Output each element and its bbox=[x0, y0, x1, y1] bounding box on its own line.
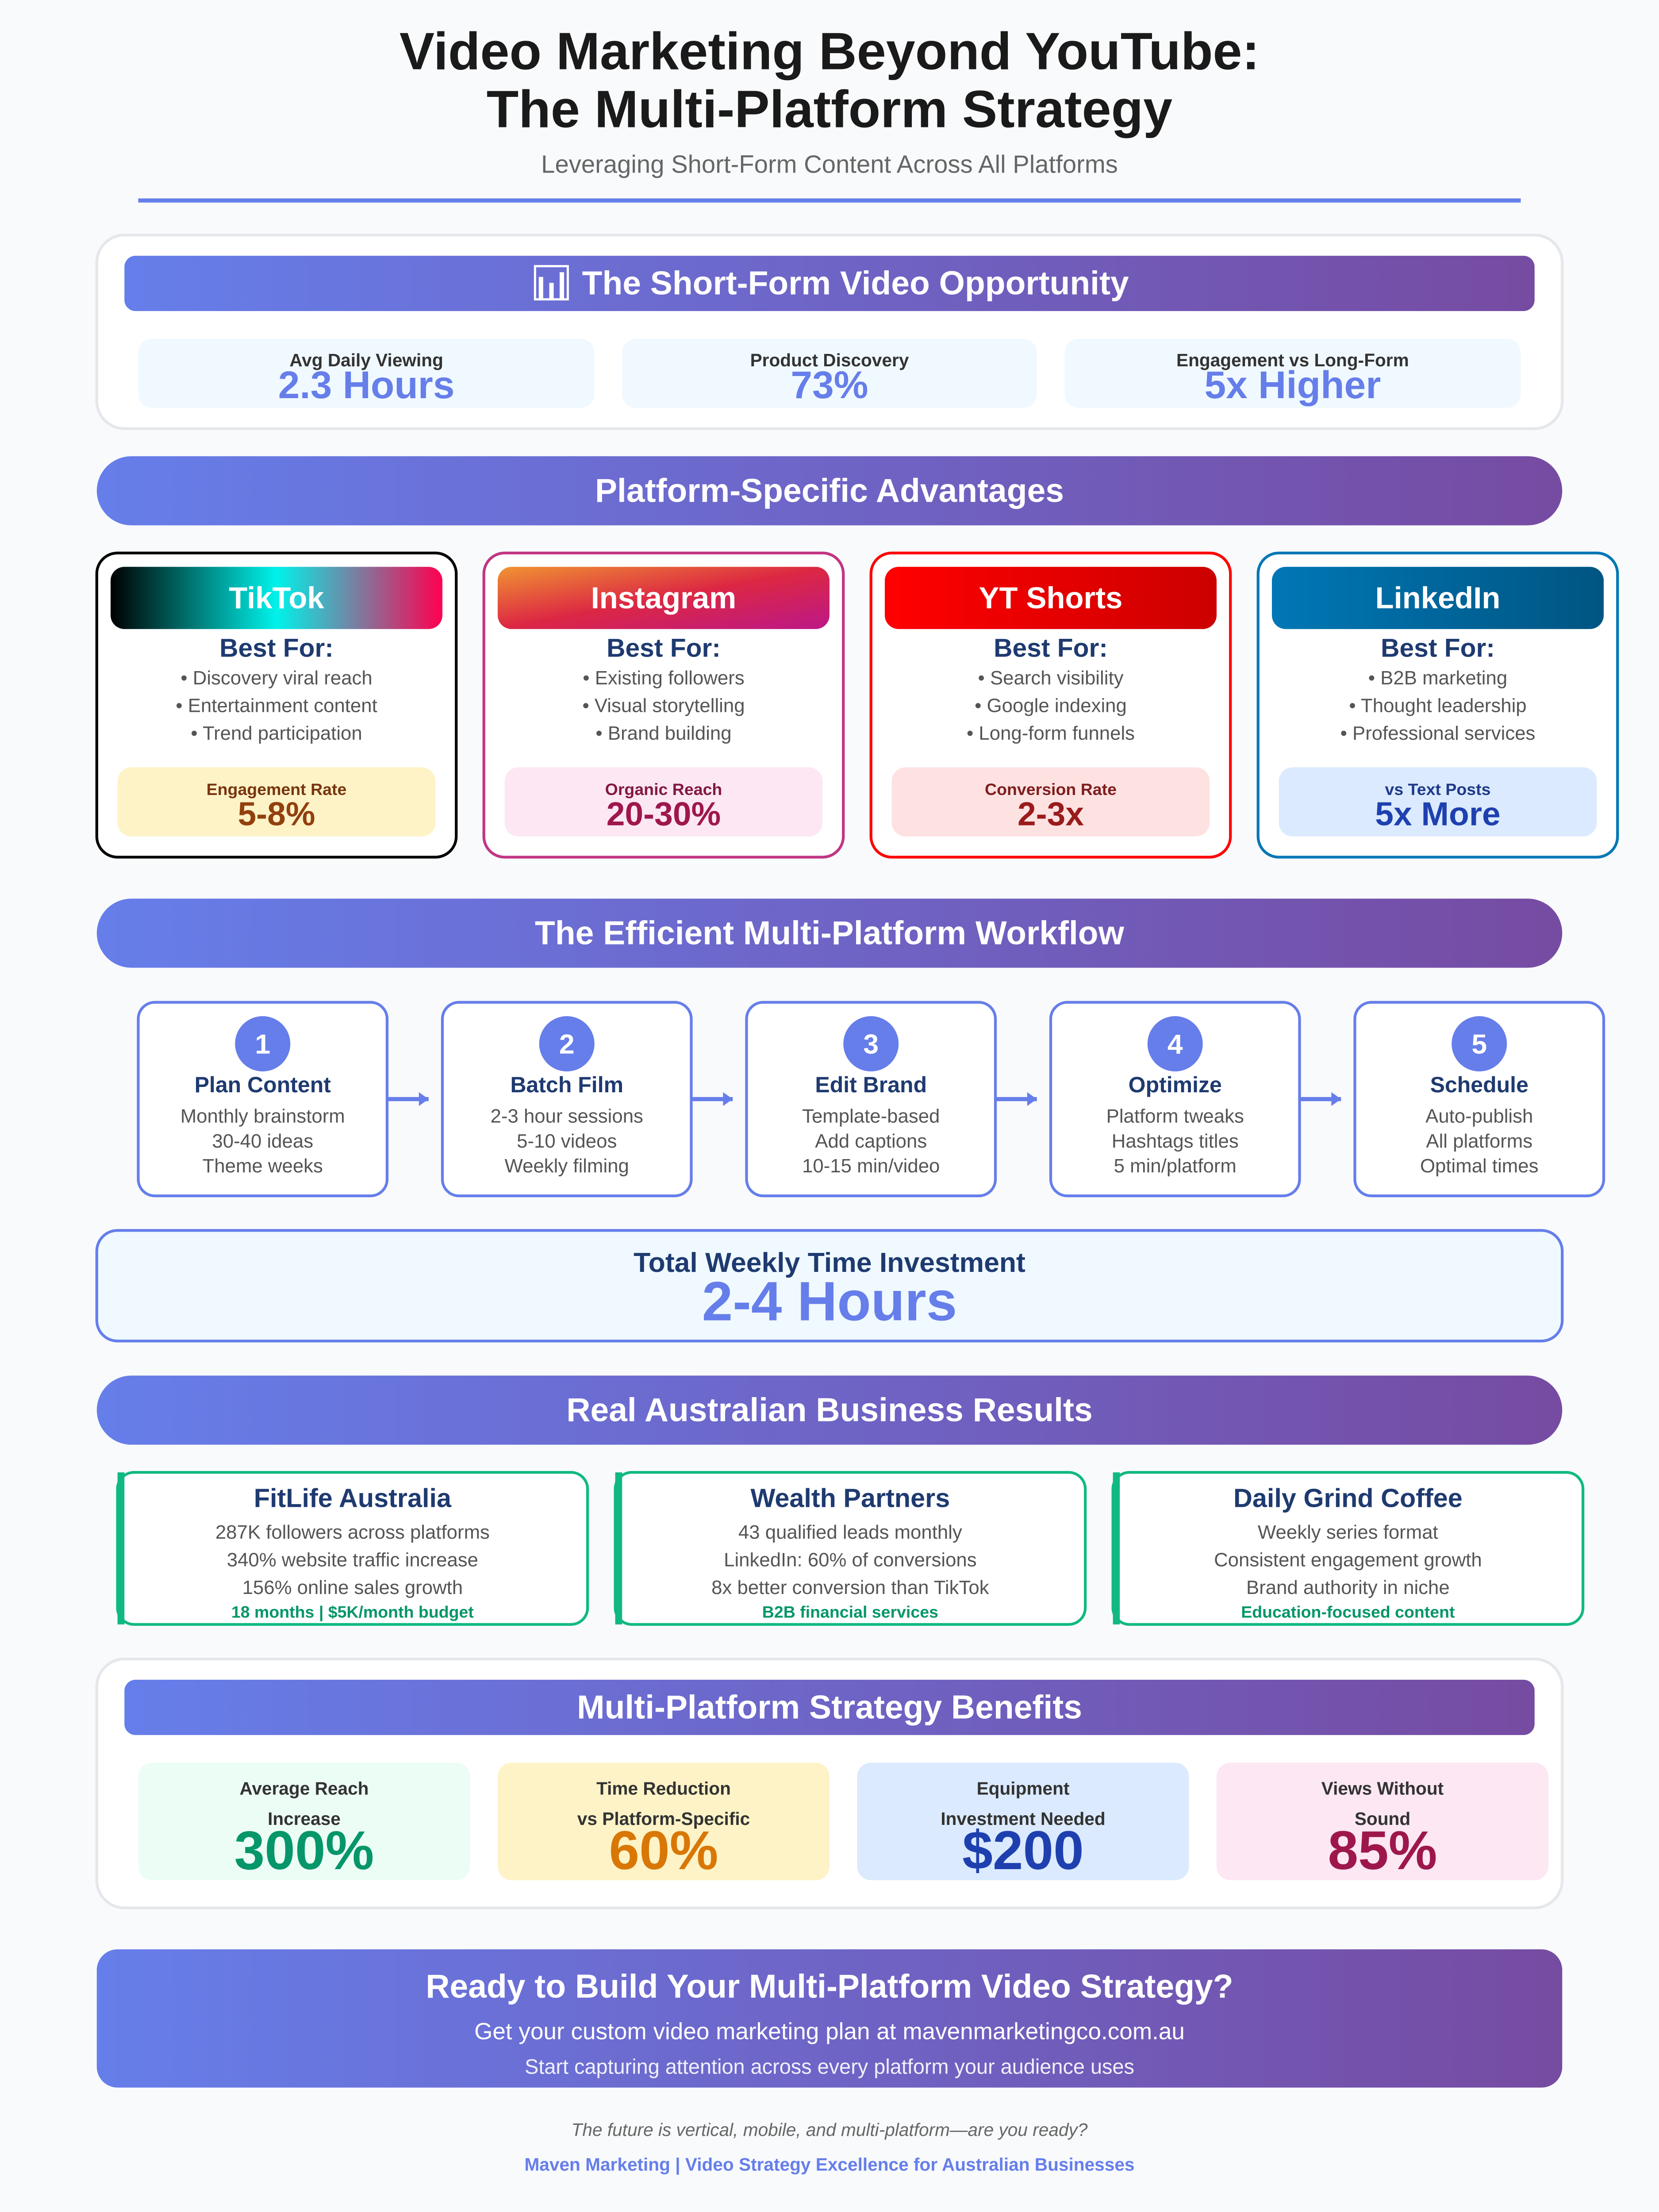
panel: LinkedIn: • B2B marketing bbox=[1368, 667, 1507, 689]
panel: TikTok: Best For: bbox=[219, 634, 334, 662]
step 1: plan content: Theme weeks bbox=[203, 1155, 323, 1177]
panel: TikTok bbox=[97, 553, 456, 857]
stat: engagement vs long-form bbox=[1064, 339, 1521, 408]
case study: Daily Grind Coffee: Daily Grind Coffee bbox=[1233, 1483, 1463, 1513]
step 3: edit brand: Add captions bbox=[815, 1130, 927, 1152]
panel: LinkedIn: • Professional services bbox=[1340, 722, 1535, 744]
step 5: schedule bbox=[1355, 1002, 1604, 1196]
panel: strategy benefits bbox=[97, 1659, 1562, 1908]
stat: views without sound: Views Without bbox=[1321, 1778, 1444, 1798]
stat: time reduction bbox=[498, 1763, 830, 1881]
arrow: step 3 to 4 bbox=[995, 1092, 1037, 1106]
case study: Wealth Partners bbox=[615, 1472, 1085, 1624]
panel: Instagram: Organic Reach bbox=[605, 780, 722, 799]
step 1: plan content: Plan Content bbox=[195, 1072, 331, 1097]
panel: LinkedIn: Best For: bbox=[1381, 634, 1495, 662]
stat: product discovery: 73% bbox=[791, 363, 868, 407]
case study: FitLife Australia: 287K followers across platforms bbox=[215, 1521, 490, 1543]
heading: australian results: Real Australian Business Results bbox=[566, 1391, 1093, 1428]
case study: Wealth Partners: 43 qualified leads monthly bbox=[738, 1521, 962, 1543]
panel: Instagram: 20-30% bbox=[607, 795, 721, 833]
panel: TikTok: • Entertainment content bbox=[176, 695, 377, 716]
panel: Instagram bbox=[484, 553, 843, 857]
stat: average reach: 300% bbox=[234, 1820, 374, 1881]
step 5: schedule: Schedule bbox=[1430, 1072, 1528, 1097]
stat: average daily viewing: 2.3 Hours bbox=[278, 363, 454, 407]
case study: Daily Grind Coffee: Education-focused content bbox=[1241, 1602, 1455, 1621]
case study: Wealth Partners: Wealth Partners bbox=[750, 1483, 950, 1513]
case study: Daily Grind Coffee bbox=[1113, 1472, 1583, 1624]
case study: Wealth Partners: B2B financial services bbox=[762, 1602, 938, 1621]
step 4: optimize: Platform tweaks bbox=[1106, 1105, 1244, 1127]
step 2: batch film: Batch Film bbox=[510, 1072, 623, 1097]
panel: YT Shorts: • Search visibility bbox=[978, 667, 1124, 689]
panel: TikTok: • Discovery viral reach bbox=[180, 667, 373, 689]
stat: time reduction: vs Platform-Specific bbox=[577, 1809, 750, 1829]
heading: opportunity: The Short-Form Video Opportunity bbox=[582, 265, 1129, 302]
heading: opportunity bbox=[124, 256, 1535, 311]
stat: engagement vs long-form: 5x Higher bbox=[1204, 363, 1381, 407]
heading: australian results bbox=[97, 1375, 1562, 1445]
step 3: edit brand: 10-15 min/video bbox=[802, 1155, 940, 1177]
step 5: schedule: All platforms bbox=[1426, 1130, 1532, 1152]
step 4: optimize bbox=[1051, 1002, 1300, 1196]
step 1: plan content bbox=[138, 1002, 387, 1196]
case study: Wealth Partners: 8x better conversion than TikTok bbox=[711, 1577, 989, 1598]
arrow: step 2 to 3 bbox=[691, 1092, 733, 1106]
panel: YT Shorts: 2-3x bbox=[1018, 795, 1084, 833]
stat: time reduction: Time Reduction bbox=[596, 1778, 731, 1798]
stat: average reach: Average Reach bbox=[240, 1778, 369, 1798]
stat: average reach: Increase bbox=[268, 1809, 341, 1829]
case study: FitLife Australia: 156% online sales growth bbox=[242, 1577, 463, 1598]
step 2: batch film: 5-10 videos bbox=[517, 1130, 617, 1152]
title: Video Marketing Beyond YouTube: bbox=[399, 22, 1260, 81]
call to action: Ready to Build Your Multi-Platform Video Strategy? bbox=[426, 1968, 1233, 2005]
panel: TikTok: Engagement Rate bbox=[207, 780, 346, 799]
panel: TikTok: 5-8% bbox=[238, 795, 315, 833]
step 4: optimize: 5 min/platform bbox=[1114, 1155, 1237, 1177]
case study: FitLife Australia bbox=[118, 1472, 588, 1624]
stat: product discovery: Product Discovery bbox=[750, 350, 909, 370]
stat: equipment: Investment Needed bbox=[941, 1809, 1106, 1829]
panel: YT Shorts: Best For: bbox=[994, 634, 1108, 662]
step 4: optimize: Hashtags titles bbox=[1112, 1130, 1239, 1152]
subtitle: Leveraging Short-Form Content Across All Platforms bbox=[541, 150, 1118, 178]
panel: LinkedIn: • Thought leadership bbox=[1349, 695, 1527, 716]
title bbox=[399, 22, 1260, 138]
case study: Daily Grind Coffee: Weekly series format bbox=[1258, 1521, 1438, 1543]
panel: Instagram: • Existing followers bbox=[583, 667, 745, 689]
arrow: step 4 to 5 bbox=[1300, 1092, 1341, 1106]
heading: platform-specific advantages bbox=[97, 456, 1562, 526]
step 5: schedule: 5 bbox=[1471, 1029, 1487, 1060]
call to action: Get your custom video marketing plan at mavenmarketingco.com.au bbox=[474, 2018, 1185, 2044]
panel: LinkedIn: LinkedIn bbox=[1375, 581, 1500, 615]
heading: platform-specific advantages: Platform-Specific Advantages bbox=[595, 472, 1064, 509]
stat: views without sound bbox=[1217, 1763, 1548, 1881]
panel: LinkedIn bbox=[1258, 553, 1617, 857]
panel: YT Shorts: • Google indexing bbox=[975, 695, 1127, 716]
step 4: optimize: Optimize bbox=[1129, 1072, 1222, 1097]
arrow: step 1 to 2 bbox=[387, 1092, 429, 1106]
panel: short-form video opportunity bbox=[97, 235, 1562, 429]
step 2: batch film: 2-3 hour sessions bbox=[491, 1105, 643, 1127]
stat: engagement vs long-form: Engagement vs Long-Form bbox=[1176, 350, 1409, 370]
callout: total weekly time: Total Weekly Time Investment bbox=[634, 1247, 1025, 1278]
step 2: batch film bbox=[442, 1002, 691, 1196]
step 3: edit brand: Edit Brand bbox=[815, 1072, 927, 1097]
stat: average reach bbox=[138, 1763, 470, 1881]
icon: bar chart bbox=[534, 265, 569, 300]
stat: product discovery bbox=[622, 339, 1037, 408]
step 4: optimize: 4 bbox=[1167, 1029, 1183, 1060]
stat: equipment: $200 bbox=[962, 1820, 1084, 1881]
stat: time reduction: 60% bbox=[609, 1820, 718, 1881]
step 3: edit brand: 3 bbox=[863, 1029, 879, 1060]
heading: benefits: Multi-Platform Strategy Benefits bbox=[577, 1688, 1082, 1725]
step 3: edit brand bbox=[747, 1002, 995, 1196]
case study: Daily Grind Coffee: Consistent engagement growth bbox=[1214, 1549, 1482, 1571]
panel: TikTok: • Trend participation bbox=[191, 722, 362, 744]
case study: FitLife Australia: 18 months | $5K/month budget bbox=[231, 1602, 474, 1621]
heading: efficient workflow bbox=[97, 899, 1562, 968]
stat: equipment bbox=[857, 1763, 1189, 1881]
title: The Multi-Platform Strategy bbox=[487, 80, 1172, 138]
case study: FitLife Australia: 340% website traffic increase bbox=[227, 1549, 478, 1571]
panel: LinkedIn: 5x More bbox=[1375, 795, 1501, 833]
callout: total weekly time bbox=[97, 1230, 1562, 1341]
panel: Instagram: Instagram bbox=[591, 581, 736, 615]
heading: efficient workflow: The Efficient Multi-Platform Workflow bbox=[535, 914, 1125, 951]
panel: LinkedIn: vs Text Posts bbox=[1385, 780, 1490, 799]
call to action: Start capturing attention across every platform your audience uses bbox=[525, 2055, 1134, 2078]
case study: Wealth Partners: LinkedIn: 60% of conversions bbox=[724, 1549, 977, 1571]
call to action bbox=[97, 1949, 1562, 2088]
step 3: edit brand: Template-based bbox=[802, 1105, 940, 1127]
panel: YT Shorts: YT Shorts bbox=[979, 581, 1122, 615]
panel: Instagram: Best For: bbox=[607, 634, 721, 662]
heading: benefits bbox=[124, 1680, 1535, 1735]
stat: average daily viewing: Avg Daily Viewing bbox=[289, 350, 443, 370]
callout: total weekly time: 2-4 Hours bbox=[702, 1271, 957, 1332]
step 5: schedule: Optimal times bbox=[1420, 1155, 1538, 1177]
step 5: schedule: Auto-publish bbox=[1425, 1105, 1533, 1127]
panel: YT Shorts: Conversion Rate bbox=[985, 780, 1117, 799]
panel: YT Shorts bbox=[871, 553, 1230, 857]
step 2: batch film: 2 bbox=[559, 1029, 575, 1060]
panel: Instagram: • Visual storytelling bbox=[582, 695, 745, 716]
footer brand: Maven Marketing | Video Strategy Excellence for Australian Businesses bbox=[524, 2154, 1135, 2174]
panel: YT Shorts: • Long-form funnels bbox=[967, 722, 1135, 744]
panel: Instagram: • Brand building bbox=[595, 722, 732, 744]
panel: TikTok: TikTok bbox=[229, 581, 324, 615]
step 2: batch film: Weekly filming bbox=[505, 1155, 629, 1177]
case study: FitLife Australia: FitLife Australia bbox=[254, 1483, 452, 1513]
footer tagline: The future is vertical, mobile, and multi-platform—are you ready? bbox=[572, 2120, 1088, 2140]
step 1: plan content: Monthly brainstorm bbox=[180, 1105, 345, 1127]
stat: views without sound: 85% bbox=[1328, 1820, 1437, 1881]
stat: equipment: Equipment bbox=[977, 1778, 1070, 1798]
case study: Daily Grind Coffee: Brand authority in niche bbox=[1246, 1577, 1450, 1598]
step 1: plan content: 30-40 ideas bbox=[212, 1130, 313, 1152]
stat: average daily viewing bbox=[138, 339, 595, 408]
stat: views without sound: Sound bbox=[1355, 1809, 1410, 1829]
step 1: plan content: 1 bbox=[255, 1029, 270, 1060]
